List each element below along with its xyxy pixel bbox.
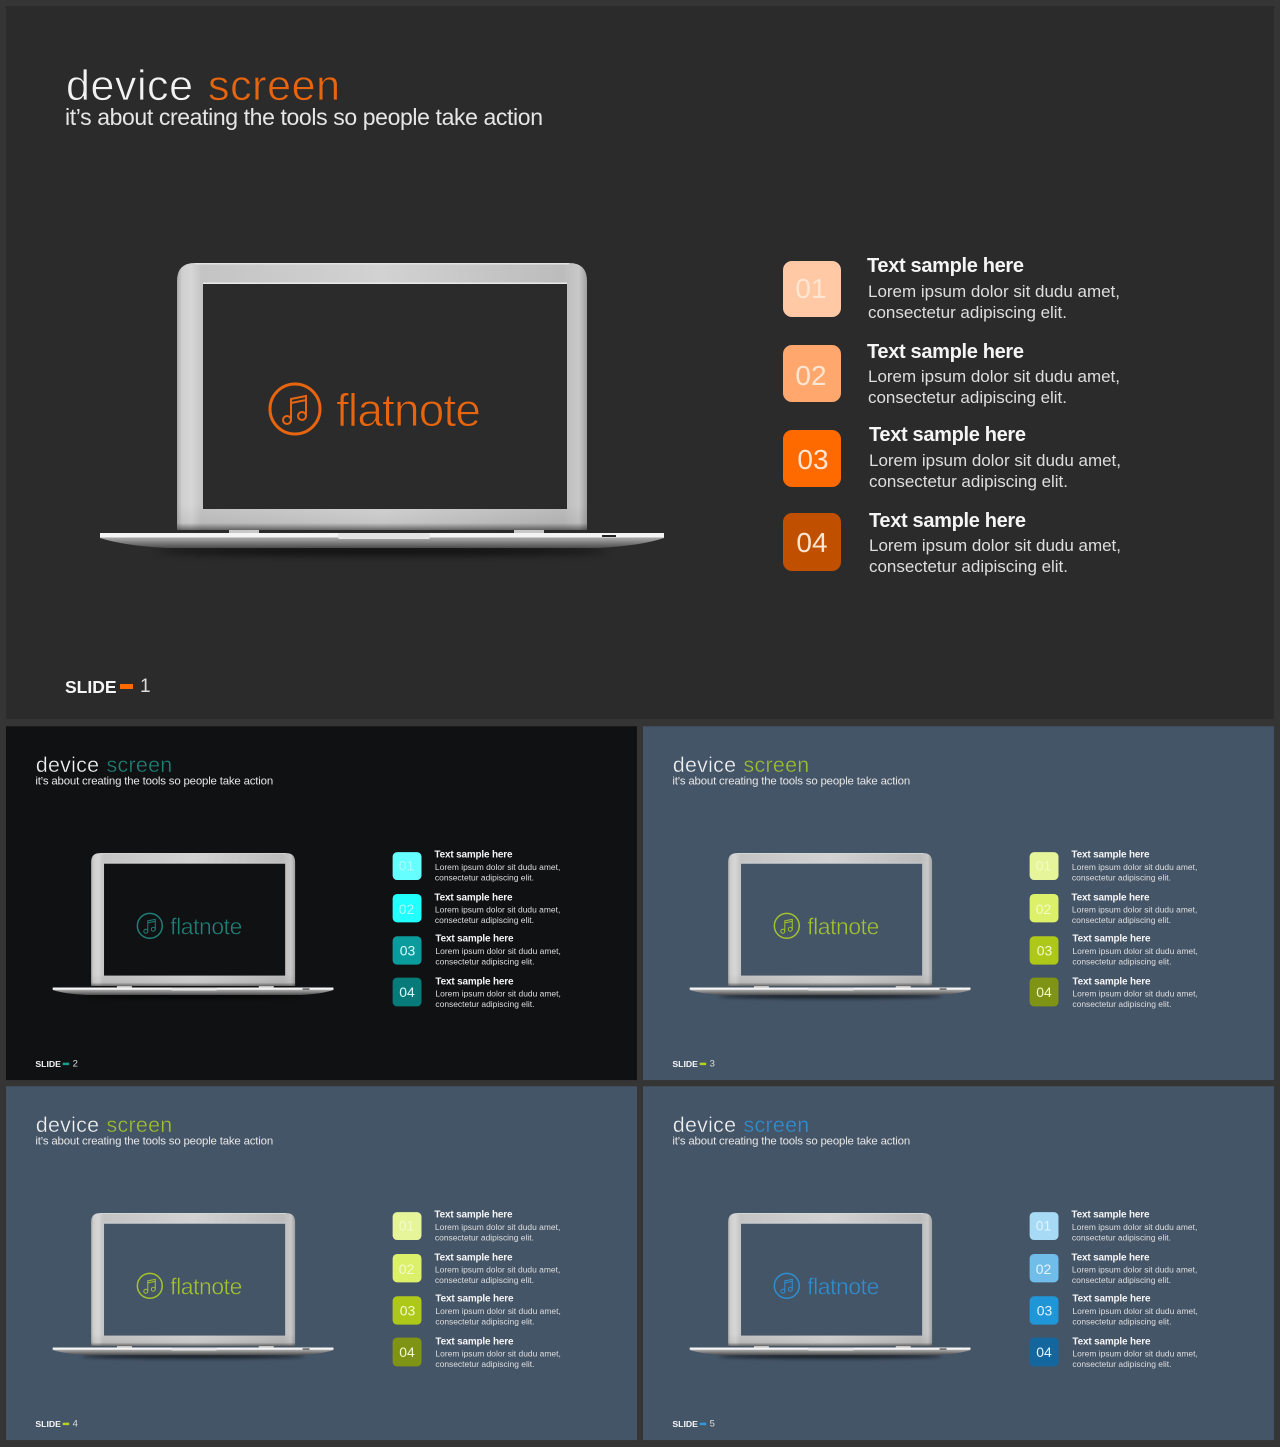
- slide 1 item 04: consectetur adipiscing elit.: [869, 557, 1068, 576]
- slide 2 item 04: 04: [399, 984, 415, 1000]
- slide 4 footer: 4: [73, 1419, 78, 1430]
- slide 5 subtitle: it’s about creating the tools so people take action: [672, 1136, 910, 1148]
- slide 3 item 04: Text sample here: [1072, 977, 1151, 988]
- slide 4 logo: [137, 1273, 242, 1299]
- slide 1: [6, 6, 1274, 719]
- slide 4 title: device: [36, 1113, 99, 1137]
- slide 1 laptop: [100, 263, 664, 555]
- slide 4 item 02: [393, 1252, 560, 1285]
- slide 5 item 04: consectetur adipiscing elit.: [1072, 1359, 1171, 1369]
- slide 4 item 03: Text sample here: [435, 1294, 514, 1305]
- slide 3 item 01: Text sample here: [1071, 850, 1150, 861]
- slide 4 item 02: 02: [399, 1261, 415, 1277]
- slide 2 item 01: consectetur adipiscing elit.: [435, 873, 534, 883]
- slide 3 item 03: consectetur adipiscing elit.: [1072, 957, 1171, 967]
- slide 2 subtitle: it’s about creating the tools so people take action: [35, 775, 273, 787]
- slide 3 title: device: [673, 753, 736, 777]
- slide 4 item 04: [393, 1337, 561, 1369]
- slide 3 item 03: Text sample here: [1072, 934, 1151, 945]
- slide 3 item 03: Lorem ipsum dolor sit dudu amet,: [1072, 946, 1198, 956]
- slide 4 item 02: consectetur adipiscing elit.: [435, 1275, 534, 1285]
- slide 1 title: device: [66, 62, 193, 110]
- slide 1 item 02: [783, 341, 1120, 407]
- slide 4 item 04: Text sample here: [435, 1337, 514, 1348]
- slide 5 item 01: consectetur adipiscing elit.: [1072, 1233, 1171, 1243]
- slide 5 footer: 5: [710, 1419, 715, 1430]
- slide 3 item 01: 01: [1036, 858, 1052, 874]
- slide 1 item 04: Lorem ipsum dolor sit dudu amet,: [869, 536, 1121, 555]
- slide 1 item 01: consectetur adipiscing elit.: [868, 303, 1067, 322]
- slide 4 item 04: consectetur adipiscing elit.: [435, 1359, 534, 1369]
- slide 2: [6, 726, 637, 1080]
- slide 2 item 04: [393, 977, 561, 1009]
- slide 1 item 04: [783, 510, 1121, 576]
- slide 3 item 02: [1030, 892, 1197, 925]
- slide 4 background: [6, 1086, 637, 1440]
- slide 5 item 01: Lorem ipsum dolor sit dudu amet,: [1072, 1222, 1197, 1232]
- slide 5 item 03: Text sample here: [1072, 1294, 1151, 1305]
- slide 1 item 02: 02: [795, 360, 827, 391]
- slide 5 footer: [672, 1419, 715, 1430]
- slide 5 title: device: [673, 1113, 736, 1137]
- slide 2 item 02: 02: [399, 901, 415, 917]
- slide 2 item 02: [393, 892, 560, 925]
- slide 5 item 02: Text sample here: [1071, 1252, 1150, 1263]
- slide 1 footer: 1: [140, 676, 151, 697]
- slide 1 item 02: Lorem ipsum dolor sit dudu amet,: [868, 367, 1120, 386]
- slide 4 item 02: Text sample here: [434, 1252, 513, 1263]
- slide 4 item 03: Lorem ipsum dolor sit dudu amet,: [435, 1306, 561, 1316]
- slide 2 item 01: [393, 850, 560, 883]
- slide 2 item 02: Lorem ipsum dolor sit dudu amet,: [435, 904, 560, 914]
- slide 1 item 03: Lorem ipsum dolor sit dudu amet,: [869, 451, 1121, 470]
- slide 3 item 01: consectetur adipiscing elit.: [1072, 873, 1171, 883]
- slide 2 logo: [137, 913, 242, 939]
- slide 5 logo: flatnote: [807, 1273, 879, 1299]
- slide 3 footer: SLIDE: [672, 1059, 698, 1069]
- slide 2 laptop: [53, 853, 333, 998]
- slide 5 item 03: Lorem ipsum dolor sit dudu amet,: [1072, 1306, 1198, 1316]
- slide 1 item 04: Text sample here: [869, 510, 1026, 532]
- slide 3 item 03: [1030, 934, 1198, 967]
- slide 3 logo: [774, 913, 879, 939]
- slide 5 logo: [774, 1273, 879, 1299]
- slide 1 footer: SLIDE: [65, 677, 117, 697]
- slide 5 item 04: Lorem ipsum dolor sit dudu amet,: [1072, 1348, 1198, 1358]
- slide 5 item 01: Text sample here: [1071, 1210, 1150, 1221]
- slide 2 item 02: consectetur adipiscing elit.: [435, 915, 534, 925]
- slide 4 footer: SLIDE: [35, 1419, 61, 1429]
- slide 3 footer: [672, 1059, 715, 1070]
- slide 4 item 03: 03: [400, 1303, 416, 1319]
- slide 5 item 04: 04: [1036, 1344, 1052, 1360]
- slide 4 item 01: [393, 1210, 560, 1243]
- slide 3 item 04: 04: [1036, 984, 1052, 1000]
- slide 5 item 02: [1030, 1252, 1197, 1285]
- slide 5 item 02: Lorem ipsum dolor sit dudu amet,: [1072, 1264, 1197, 1274]
- slide 2 footer: [35, 1059, 78, 1070]
- slide 1 item 02: consectetur adipiscing elit.: [868, 388, 1067, 407]
- slide 2 item 03: [393, 934, 561, 967]
- slide 5 item 01: 01: [1036, 1218, 1052, 1234]
- slide 5 item 03: consectetur adipiscing elit.: [1072, 1317, 1171, 1327]
- slide 2 item 02: Text sample here: [434, 892, 513, 903]
- slide 1 item 03: Text sample here: [869, 424, 1026, 446]
- slide 1 item 03: 03: [797, 444, 829, 475]
- slide 1 item 03: [783, 424, 1121, 491]
- slide 1 subtitle: it’s about creating the tools so people take action: [65, 104, 543, 130]
- slide 5: [643, 1086, 1274, 1440]
- slide 2 item 01: 01: [399, 858, 415, 874]
- slide 4 item 01: 01: [399, 1218, 415, 1234]
- slide 4 logo: flatnote: [170, 1273, 242, 1299]
- slide 1 footer: [65, 676, 151, 697]
- slide 2 item 01: Text sample here: [434, 850, 513, 861]
- slide 1 item 02: Text sample here: [867, 341, 1024, 363]
- slide 3 item 04: [1030, 977, 1198, 1009]
- slide 3 background: [643, 726, 1274, 1080]
- slide 5 item 02: 02: [1036, 1261, 1052, 1277]
- slide 4: [6, 1086, 637, 1440]
- slide 5 footer: SLIDE: [672, 1419, 698, 1429]
- slide 1 title: screen: [208, 62, 340, 110]
- slide 3 footer: 3: [710, 1059, 715, 1070]
- slide 4 subtitle: it’s about creating the tools so people take action: [35, 1136, 273, 1148]
- slide 2 footer: SLIDE: [35, 1059, 61, 1069]
- slide 2 item 04: Lorem ipsum dolor sit dudu amet,: [435, 988, 561, 998]
- slide 3 item 02: consectetur adipiscing elit.: [1072, 915, 1171, 925]
- slide 5 item 01: [1030, 1210, 1197, 1243]
- slide 1 item 01: [783, 255, 1120, 322]
- slide 2 item 03: consectetur adipiscing elit.: [435, 957, 534, 967]
- slide 4 item 01: Text sample here: [434, 1210, 513, 1221]
- slide 1 item 03: consectetur adipiscing elit.: [869, 472, 1068, 491]
- slide 3 title: screen: [744, 753, 809, 777]
- slide 4 laptop: [53, 1213, 333, 1358]
- slide 2 title: screen: [107, 753, 172, 777]
- slide 3 item 01: [1030, 850, 1197, 883]
- slide 3 item 04: Lorem ipsum dolor sit dudu amet,: [1072, 988, 1198, 998]
- slide 3 laptop: [690, 853, 970, 998]
- slide 4 footer: [35, 1419, 78, 1430]
- slide 5 item 04: [1030, 1337, 1198, 1369]
- slide 4 item 03: consectetur adipiscing elit.: [435, 1317, 534, 1327]
- slide 1 background: [6, 6, 1274, 719]
- slide 3: [643, 726, 1274, 1080]
- slide 1 logo: flatnote: [336, 384, 481, 436]
- slide 3 item 02: Text sample here: [1071, 892, 1150, 903]
- slide 1 item 01: 01: [795, 273, 827, 304]
- slide 5 background: [643, 1086, 1274, 1440]
- slide 5 item 03: 03: [1037, 1303, 1053, 1319]
- slide 1 item 01: Lorem ipsum dolor sit dudu amet,: [868, 282, 1120, 301]
- slide 2 logo: flatnote: [170, 913, 242, 939]
- slide 3 subtitle: it’s about creating the tools so people take action: [672, 775, 910, 787]
- slide 5 title: screen: [744, 1113, 809, 1137]
- slide 2 item 04: Text sample here: [435, 977, 514, 988]
- slide 5 laptop: [690, 1213, 970, 1358]
- slide 4 item 01: consectetur adipiscing elit.: [435, 1233, 534, 1243]
- slide 3 item 01: Lorem ipsum dolor sit dudu amet,: [1072, 862, 1197, 872]
- slide 4 item 04: 04: [399, 1344, 415, 1360]
- slide 4 item 04: Lorem ipsum dolor sit dudu amet,: [435, 1348, 561, 1358]
- slide 3 item 02: Lorem ipsum dolor sit dudu amet,: [1072, 904, 1197, 914]
- slide 2 footer: 2: [73, 1059, 78, 1070]
- slide 3 item 02: 02: [1036, 901, 1052, 917]
- slide 4 item 02: Lorem ipsum dolor sit dudu amet,: [435, 1264, 560, 1274]
- slide 4 item 03: [393, 1294, 561, 1327]
- slide 2 item 04: consectetur adipiscing elit.: [435, 999, 534, 1009]
- slide 1 logo: [270, 384, 481, 436]
- slide 2 item 01: Lorem ipsum dolor sit dudu amet,: [435, 862, 560, 872]
- slide 1 item 01: Text sample here: [867, 255, 1024, 277]
- slide 3 logo: flatnote: [807, 913, 879, 939]
- slide 5 item 02: consectetur adipiscing elit.: [1072, 1275, 1171, 1285]
- slide 5 item 04: Text sample here: [1072, 1337, 1151, 1348]
- slide 3 item 04: consectetur adipiscing elit.: [1072, 999, 1171, 1009]
- slide 2 item 03: Lorem ipsum dolor sit dudu amet,: [435, 946, 561, 956]
- slide 5 item 03: [1030, 1294, 1198, 1327]
- slide 4 title: screen: [107, 1113, 172, 1137]
- slide 2 item 03: Text sample here: [435, 934, 514, 945]
- slide 4 item 01: Lorem ipsum dolor sit dudu amet,: [435, 1222, 560, 1232]
- slide 2 background: [6, 726, 637, 1080]
- slide 1 item 04: 04: [796, 527, 828, 558]
- slide 2 item 03: 03: [400, 943, 416, 959]
- slide 3 item 03: 03: [1037, 943, 1053, 959]
- slide 2 title: device: [36, 753, 99, 777]
